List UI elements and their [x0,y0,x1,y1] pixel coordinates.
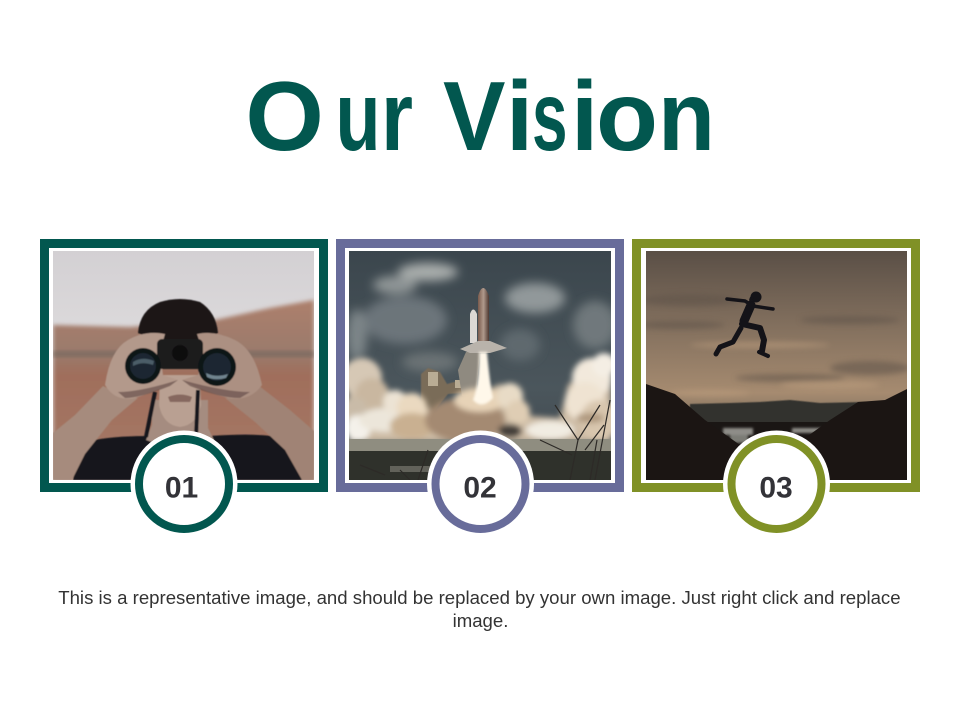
title: V [443,61,506,171]
number badge 01: 01 [165,472,198,504]
card frame 2 [340,244,620,488]
card frame 3 [636,244,916,488]
title: i [506,61,533,171]
photo: person with binoculars [53,251,314,480]
number badge 02: 02 [463,472,497,504]
photo: runner leaping over a gap [635,251,910,482]
title: i [571,61,598,171]
panel: jumping figure photo card [635,244,916,538]
number badge 03: 03 [759,472,793,504]
caption text: image. [453,610,508,631]
number badge 01 [130,430,238,538]
title: s [532,61,568,171]
title: n [658,61,715,171]
panel: binoculars photo card [44,244,324,538]
number badge 02 [427,430,534,538]
photo: rocket launch [341,251,620,480]
panel: rocket photo card [340,244,620,538]
title: o [596,61,658,171]
title: r [381,61,413,171]
title: O [245,61,324,171]
caption text: This is a representative image, and should be replaced by your own image. Just right click and replace [58,587,901,608]
title: u [336,61,380,171]
number badge 03 [723,430,830,538]
card frame 1 [44,244,324,488]
